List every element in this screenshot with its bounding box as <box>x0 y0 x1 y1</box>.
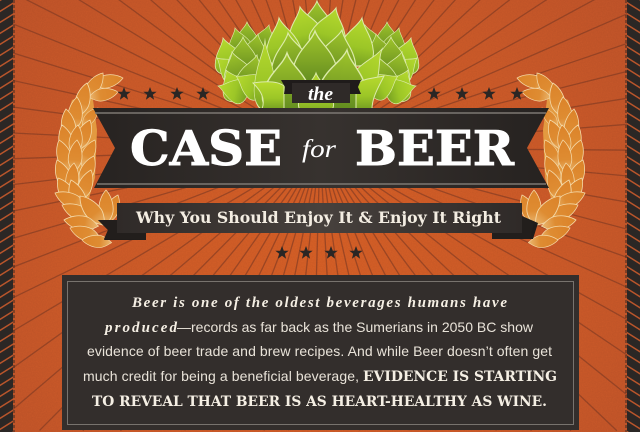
main title banner <box>93 108 549 188</box>
right wheat wreath <box>516 69 590 249</box>
right striped border <box>626 0 640 432</box>
subtitle text: Why You Should Enjoy It & Enjoy It Right <box>135 208 502 227</box>
intro line 2 italic lead: produced <box>103 320 178 336</box>
icon: right hop cone <box>353 22 425 106</box>
title word: for: for <box>302 136 336 163</box>
ribbon word: the: the <box>308 84 334 105</box>
title word: CASE: CASE <box>130 121 282 177</box>
intro line 5 emphasis: TO REVEAL THAT BEER IS AS HEART-HEALTHY AS WINE. <box>92 394 547 410</box>
intro line 4 emphasis: EVIDENCE IS STARTING <box>363 369 557 385</box>
bottom stars <box>275 246 363 259</box>
intro line 1: Beer is one of the oldest beverages humans have <box>131 295 507 311</box>
small ribbon: the <box>281 80 361 105</box>
title word: BEER: BEER <box>355 121 515 177</box>
intro line 3: evidence of beer trade and brew recipes. And while Beer doesn’t often get <box>87 343 552 359</box>
top right stars <box>427 87 524 100</box>
icon: left hop cone <box>209 22 281 106</box>
left wheat wreath <box>50 69 124 249</box>
panel: introduction <box>62 275 579 430</box>
intro line 4: much credit for being a beneficial beverage, <box>83 368 359 384</box>
top left stars <box>117 87 210 100</box>
left striped border <box>0 0 14 432</box>
intro line 2: —records as far back as the Sumerians in 2050 BC show <box>177 319 534 335</box>
subtitle ribbon <box>98 203 538 240</box>
icon: central hop cone <box>253 1 394 117</box>
